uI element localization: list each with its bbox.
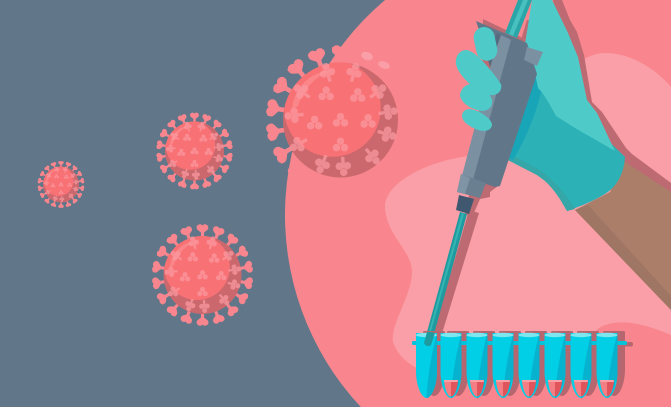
arm <box>575 157 671 310</box>
pipette tip end in first tube <box>424 332 435 346</box>
tube 8 <box>596 333 618 398</box>
pipette shadow <box>432 19 548 340</box>
tube 1 (empty) <box>416 333 437 398</box>
finger 1 <box>472 25 499 63</box>
tube 3 <box>466 333 488 398</box>
virus: biggest, entering the circle <box>265 45 416 195</box>
glove: cuff fold shade <box>508 156 575 211</box>
virus: large lower <box>152 224 253 326</box>
pipette body <box>457 21 543 198</box>
tube strip bar <box>412 341 627 345</box>
tube strip shadow <box>418 331 633 396</box>
fingers <box>456 25 501 131</box>
hand shadow <box>553 0 671 192</box>
virus: smallest <box>37 161 85 208</box>
pipette plunger <box>505 0 532 38</box>
pipette nozzle <box>456 195 474 214</box>
faded spikes on the circle <box>360 50 391 70</box>
tubes <box>416 333 618 398</box>
pipette collar <box>457 174 486 198</box>
glove: thumb light <box>525 0 615 151</box>
tube 7 <box>570 333 592 398</box>
pink circle backdrop <box>285 0 671 407</box>
tube 6 <box>544 333 566 398</box>
finger 2 <box>456 50 501 95</box>
virus: medium <box>156 113 233 189</box>
light pink blob <box>385 53 671 378</box>
pipette tip <box>424 212 467 346</box>
tube 5 <box>518 333 540 398</box>
finger 4 <box>462 109 492 131</box>
glove: wrist-side blue edge <box>508 68 544 160</box>
glove <box>508 0 625 211</box>
tube 2 <box>440 333 462 398</box>
finger 3 <box>460 84 492 111</box>
glove: back of hand dark <box>508 72 625 211</box>
tube 4 <box>492 333 514 398</box>
pipette thumb rest <box>524 47 543 66</box>
